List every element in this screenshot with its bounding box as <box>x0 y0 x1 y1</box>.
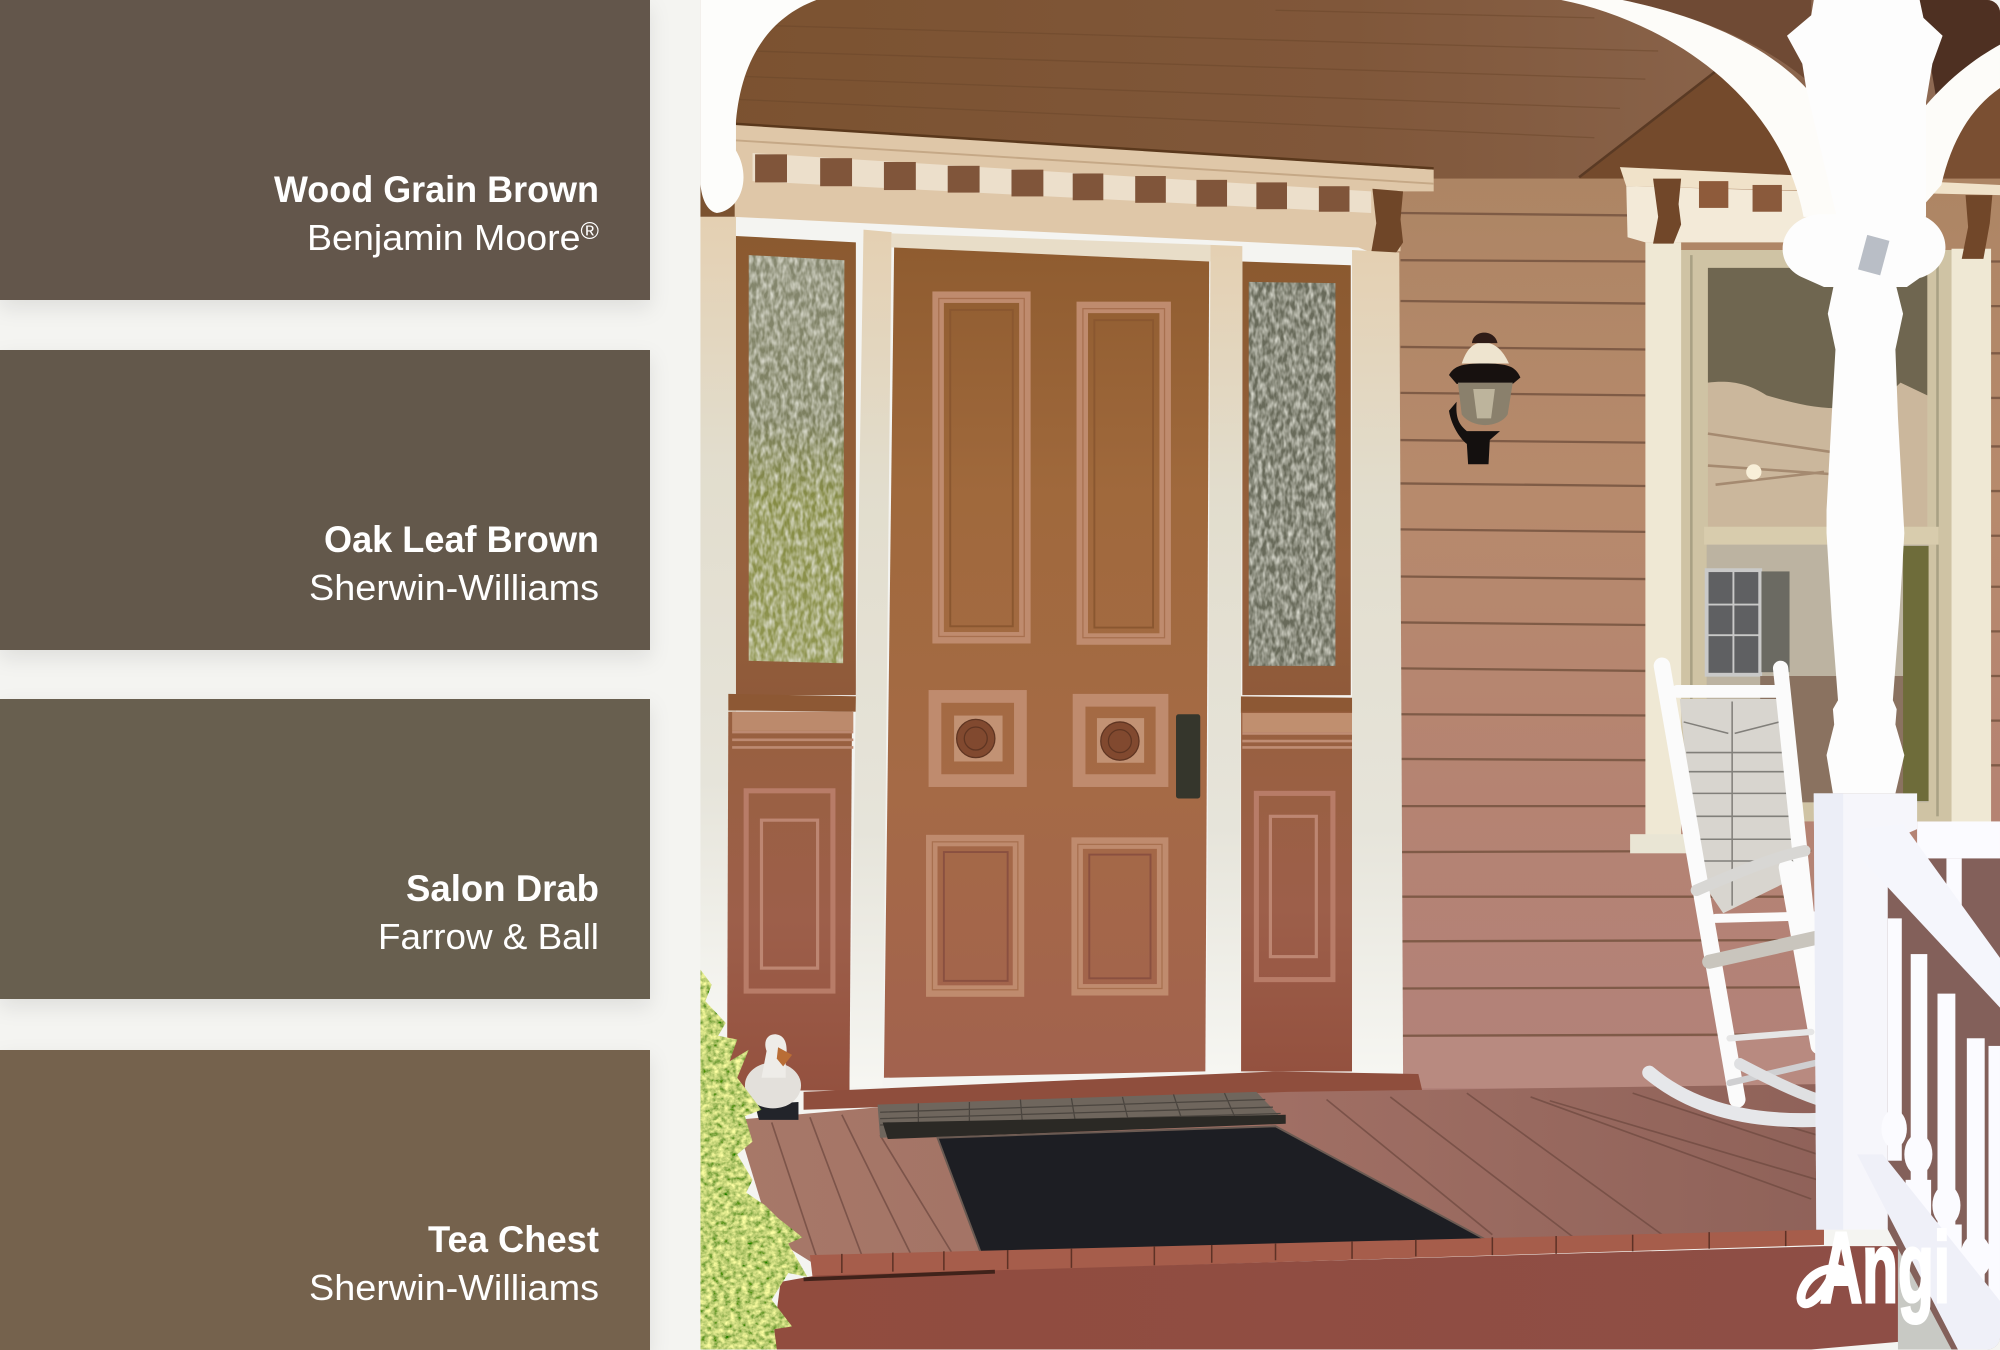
door handle <box>1176 714 1200 798</box>
spandrel arches <box>1561 0 2000 217</box>
swatch: Oak Leaf Brown: Sherwin-Williams <box>309 567 599 608</box>
porch step <box>772 1246 1964 1349</box>
column shaft <box>1827 283 1904 793</box>
right sidelight <box>1240 261 1355 713</box>
shrub <box>700 969 807 1349</box>
far right door trim post <box>1352 250 1403 1074</box>
rocking chair <box>1649 666 1819 1120</box>
cornice over the door <box>735 124 1434 253</box>
wall lamp <box>1449 333 1520 464</box>
porch floor <box>736 1084 1824 1265</box>
swatch: Tea Chest <box>0 1050 650 1350</box>
rosettes <box>957 719 1139 760</box>
threshold sill <box>804 1071 1422 1110</box>
header under the cornice <box>892 233 1210 261</box>
left lower panel <box>727 712 853 1091</box>
porch ceiling <box>700 0 2000 217</box>
swatch: Salon Drab: Farrow & Ball <box>378 916 599 957</box>
window sash <box>1680 250 1953 821</box>
right door trim post <box>1208 244 1242 980</box>
swatch: Salon Drab: Salon Drab <box>406 868 599 909</box>
swatch: Wood Grain Brown: Benjamin Moore <box>307 217 569 258</box>
column base post <box>1814 793 1917 1230</box>
swatch: Tea Chest: Tea Chest <box>428 1219 599 1260</box>
Angi logo <box>1801 1212 1950 1324</box>
left sidelight <box>728 236 861 712</box>
corbel <box>1371 189 1403 254</box>
lower glass <box>1707 543 1929 802</box>
diagonal hand rail <box>1860 824 2000 1008</box>
front door <box>884 247 1209 1078</box>
door panels <box>932 297 1165 991</box>
column capital <box>1787 0 1943 217</box>
swatch: Wood Grain Brown <box>0 0 650 300</box>
upper glass <box>1708 268 1927 527</box>
left wall post <box>700 216 736 930</box>
duck figurine <box>745 1034 801 1120</box>
balusters <box>1881 918 2000 1349</box>
window trim <box>1620 167 2000 853</box>
panel: porch photo illustration <box>700 0 2000 1349</box>
swatch: Oak Leaf Brown <box>0 350 650 650</box>
railing <box>1857 821 2000 1349</box>
siding wall <box>1397 179 2000 1091</box>
turned column <box>1561 0 2000 1230</box>
horizontal top rail <box>1917 821 2000 858</box>
swatch: Tea Chest: Sherwin-Williams <box>309 1267 599 1308</box>
left arch <box>700 0 816 213</box>
swatch: Salon Drab <box>0 699 650 999</box>
swatch: Oak Leaf Brown: Oak Leaf Brown <box>324 519 599 560</box>
upper doormat <box>878 1092 1286 1139</box>
left door trim post <box>849 230 892 1087</box>
swatch: Wood Grain Brown: ® <box>581 218 599 245</box>
right window <box>1680 250 1953 821</box>
capital bracket plate <box>1858 235 1889 275</box>
floor edge strip <box>810 1230 1824 1277</box>
panel: paint swatches <box>0 0 650 1350</box>
backdrop behind balusters <box>1885 855 2000 1349</box>
lower doormat <box>937 1126 1486 1256</box>
dentil row <box>755 154 1349 212</box>
swatch: Wood Grain Brown: Wood Grain Brown <box>274 169 599 210</box>
right lower panel <box>1241 712 1352 1071</box>
bottom rail <box>1857 1154 2000 1349</box>
